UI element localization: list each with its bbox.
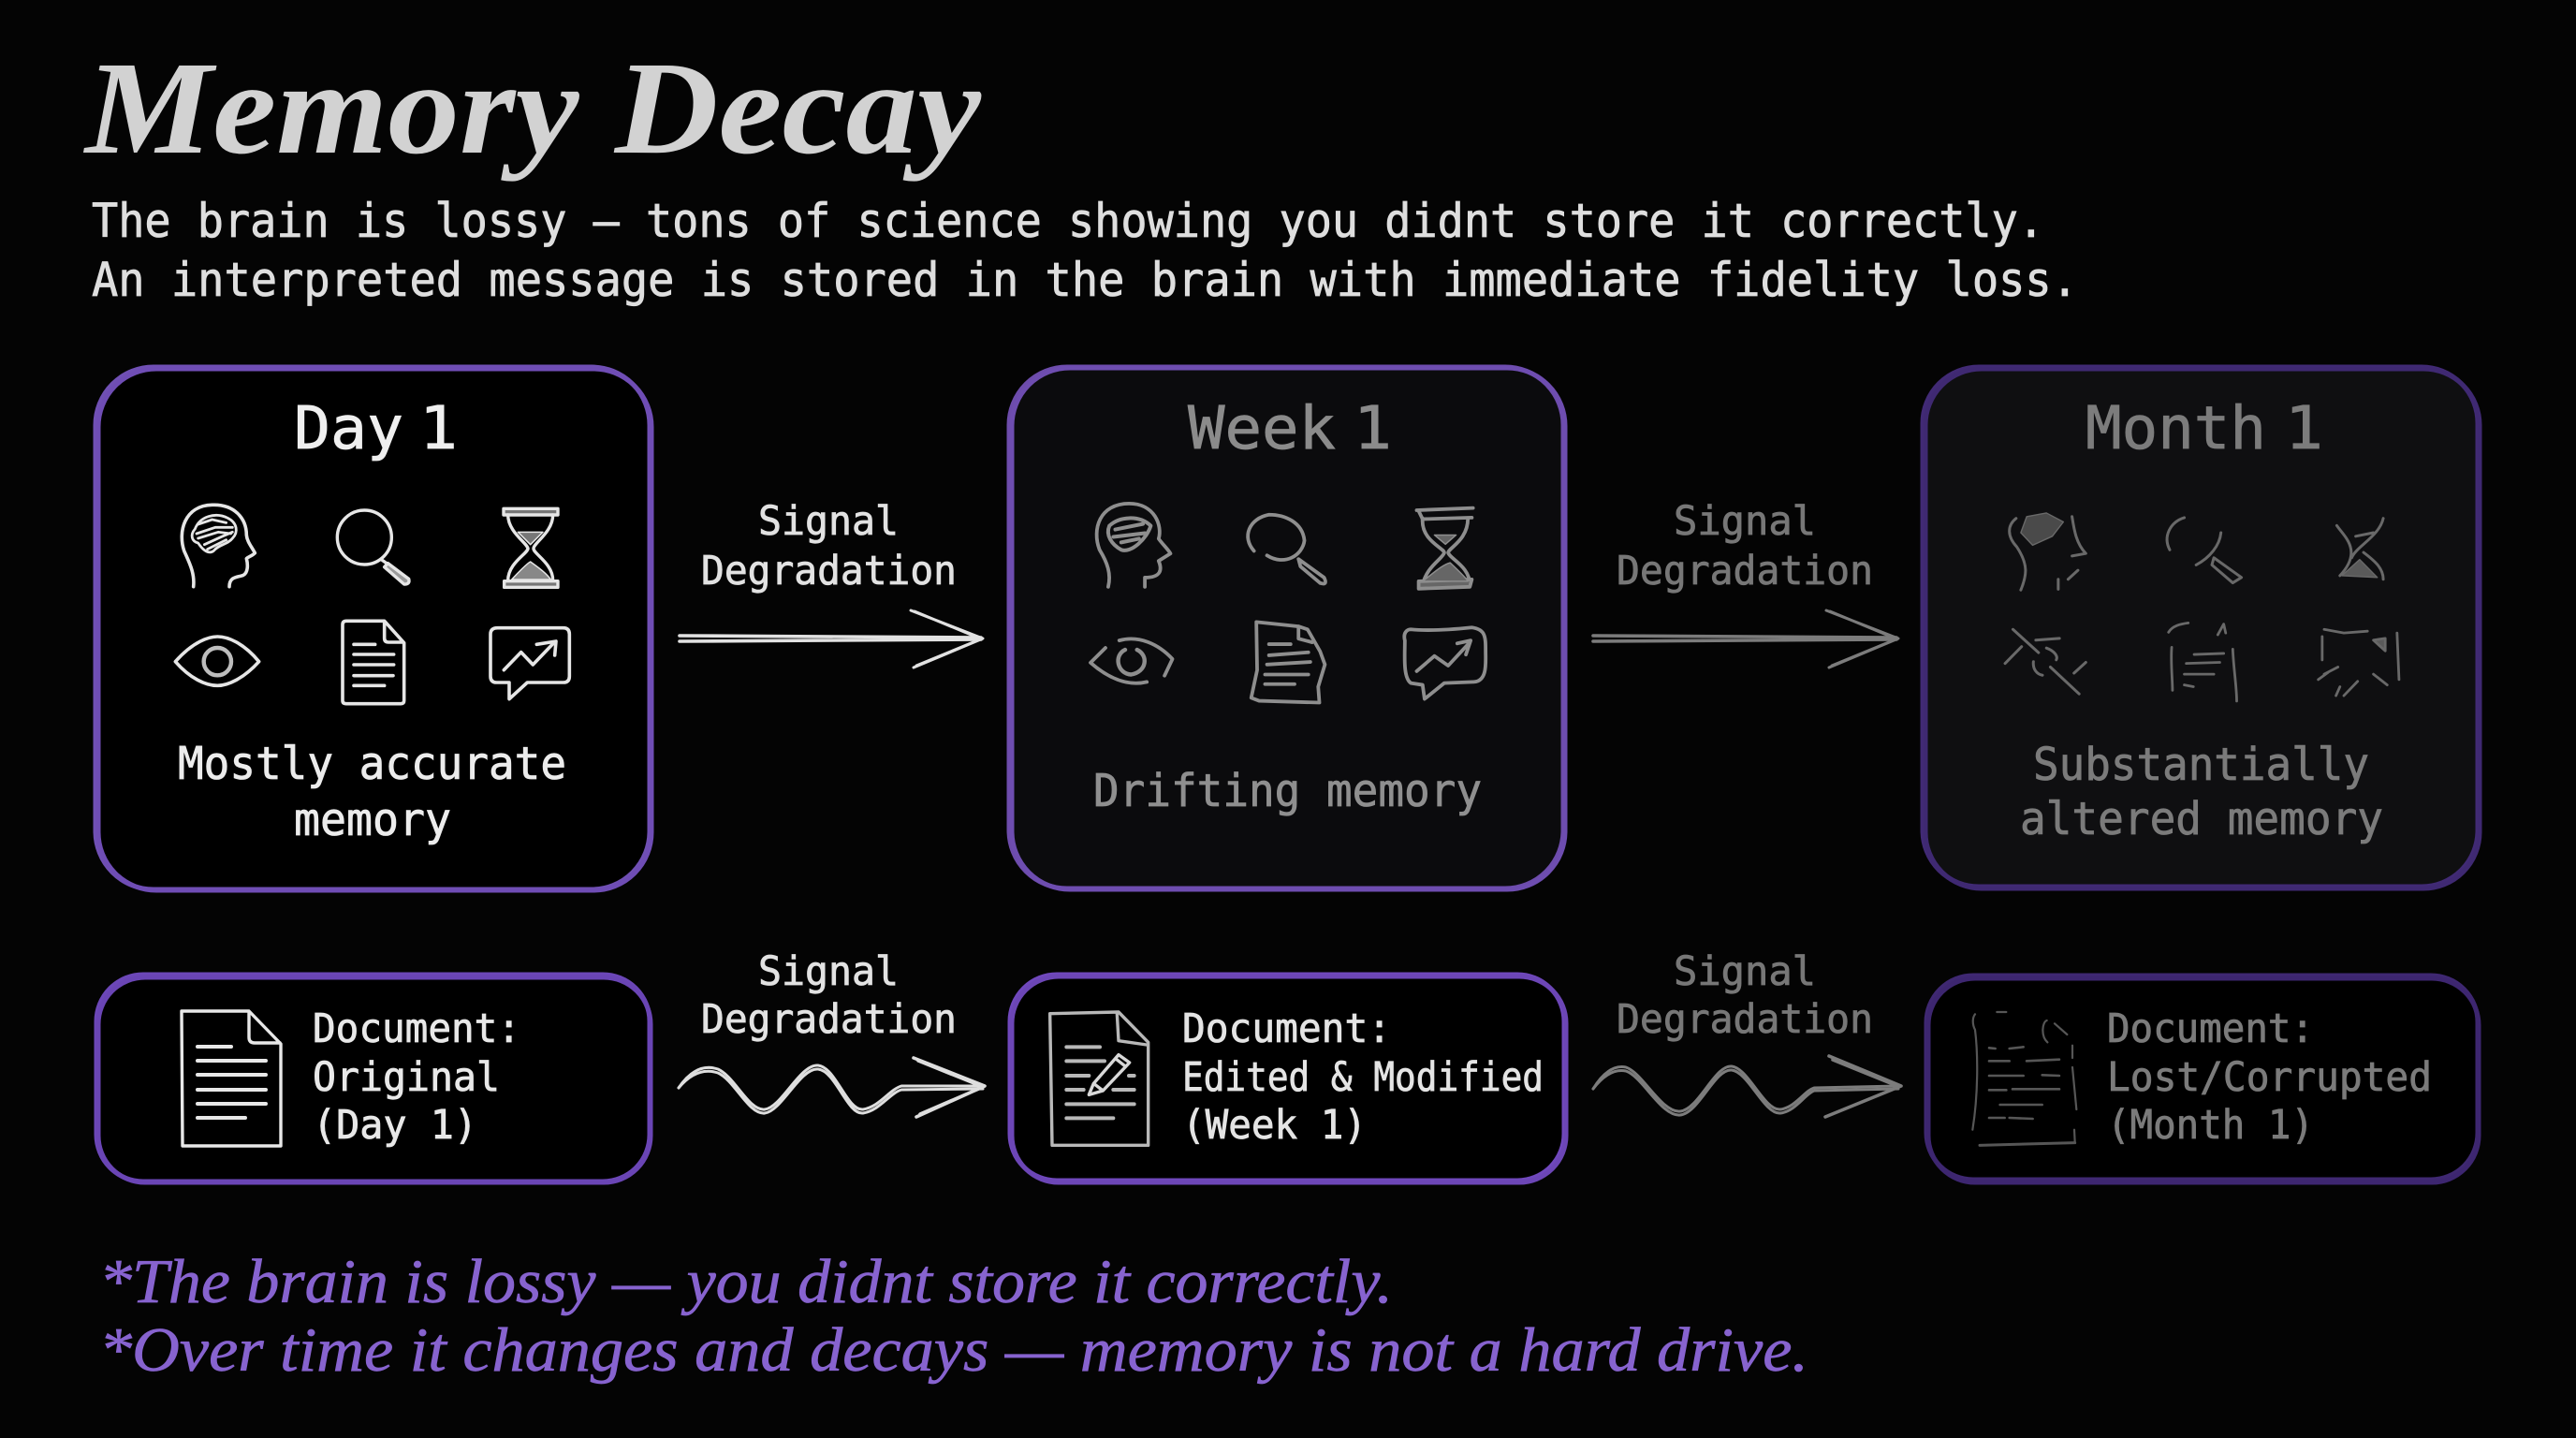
- arrow label: Signal Degradation 1: [701, 498, 957, 594]
- icon: eye, drifting: [1090, 638, 1173, 683]
- arrow label: Signal Degradation 2: [1617, 498, 1873, 594]
- arrow label: Signal Degradation 2: Degradation: [1617, 548, 1873, 594]
- label: Document Edited and Modified Week 1: (Week 1): [1182, 1102, 1367, 1149]
- heading: Month 1: 1: [2285, 394, 2323, 462]
- arrow label: Signal Degradation 1: Signal: [758, 498, 899, 545]
- label: Document Edited and Modified Week 1: Edited & Modified: [1182, 1054, 1544, 1101]
- icon: document, drifting: [1251, 622, 1325, 703]
- caption: Substantially altered memory: [2020, 739, 2383, 845]
- label: Document Lost Corrupted Month 1: (Month 1): [2107, 1102, 2314, 1149]
- label: Document Lost Corrupted Month 1: [2107, 1005, 2432, 1149]
- icon: chart speech bubble: [490, 628, 569, 699]
- title: Memory Decay: [83, 34, 982, 182]
- panel: Document Original: [96, 975, 651, 1182]
- arrow label: Signal Degradation 2: Signal: [1674, 498, 1816, 545]
- label: Document Original Day 1: (Day 1): [313, 1102, 477, 1149]
- label: Document Original Day 1: Document:: [313, 1005, 520, 1052]
- icon: hourglass, fragmented: [2336, 519, 2383, 580]
- heading: Day 1: 1: [419, 394, 458, 462]
- panel: Week 1: [1009, 367, 1565, 889]
- icon: corrupted document: [1972, 1012, 2076, 1145]
- wave label: Signal Degradation 4: [1617, 948, 1873, 1043]
- footer notes: [99, 1247, 1808, 1385]
- subtitle text block: [92, 194, 2078, 307]
- caption: Mostly accurate memory: Mostly accurate: [178, 738, 566, 790]
- label: Document Original Day 1: Original: [313, 1054, 500, 1101]
- icon: original document: [182, 1011, 281, 1146]
- panel: Day 1: [95, 367, 651, 890]
- wave label: Signal Degradation 3: Degradation: [701, 996, 957, 1043]
- subtitle text block: An interpreted message is stored in the brain with immediate fidelity loss.: [92, 253, 2078, 307]
- wave label: Signal Degradation 4: Signal: [1674, 948, 1816, 995]
- icon: document, fragmented: [2169, 623, 2237, 701]
- label: Document Edited and Modified Week 1: Document:: [1182, 1005, 1391, 1052]
- subtitle text block: The brain is lossy — tons of science showing you didnt store it correctly.: [92, 194, 2044, 248]
- icon: eye: [175, 637, 259, 685]
- arrow 1: [680, 610, 983, 668]
- icon: chart speech bubble, fragmented: [2319, 629, 2399, 696]
- label: Document Lost Corrupted Month 1: Lost/Corrupted: [2107, 1054, 2432, 1101]
- icon: chart speech bubble, drifting: [1404, 627, 1486, 699]
- icon: magnifying glass: [337, 510, 409, 584]
- wave label: Signal Degradation 4: Degradation: [1617, 996, 1873, 1043]
- wave label: Signal Degradation 3: [701, 948, 957, 1043]
- heading: Week 1: [1188, 394, 1392, 462]
- icon: eye, crossed out and fragmented: [2005, 629, 2086, 694]
- heading: Month 1: Month: [2086, 394, 2266, 462]
- wave label: Signal Degradation 3: Signal: [758, 948, 899, 995]
- label: Document Lost Corrupted Month 1: Document:: [2107, 1005, 2314, 1052]
- panel: Month 1: [1923, 367, 2480, 888]
- footer notes: *The brain is lossy — you didnt store it correctly.: [99, 1247, 1393, 1316]
- footer notes: *Over time it changes and decays — memory is not a hard drive.: [99, 1315, 1808, 1385]
- icon: head with brain, drifting: [1097, 504, 1170, 587]
- caption: Drifting memory: Drifting memory: [1093, 765, 1482, 817]
- icon: document: [343, 621, 404, 704]
- caption: Mostly accurate memory: memory: [294, 794, 451, 846]
- heading: Day 1: Day: [294, 394, 403, 462]
- caption: Mostly accurate memory: [178, 738, 566, 846]
- heading: Day 1: [294, 394, 458, 462]
- label: Document Original Day 1: [313, 1005, 520, 1149]
- arrow label: Signal Degradation 1: Degradation: [701, 548, 957, 594]
- icon: magnifying glass, fragmented: [2167, 518, 2242, 583]
- icon: magnifying glass, drifting: [1248, 515, 1325, 584]
- panel: Document Edited and Modified: [1010, 975, 1566, 1182]
- icon: head with brain: [182, 505, 255, 587]
- icon: edited document with pencil: [1050, 1012, 1149, 1145]
- icon: hourglass: [504, 508, 558, 587]
- arrow 2: [1593, 610, 1898, 668]
- icon: hourglass, drifting: [1416, 508, 1473, 589]
- icon: head with brain, fragmented: [2010, 513, 2086, 590]
- caption: Substantially altered memory: Substantially: [2033, 739, 2369, 791]
- caption: Substantially altered memory: altered memory: [2020, 793, 2383, 845]
- panel: Document Lost or Corrupted: [1926, 976, 2479, 1182]
- heading: Week 1: 1: [1354, 394, 1392, 462]
- label: Document Edited and Modified Week 1: [1182, 1005, 1544, 1149]
- wavy arrow 2: [1593, 1056, 1901, 1117]
- heading: Week 1: Week: [1188, 394, 1336, 462]
- wavy arrow 1: [679, 1058, 985, 1117]
